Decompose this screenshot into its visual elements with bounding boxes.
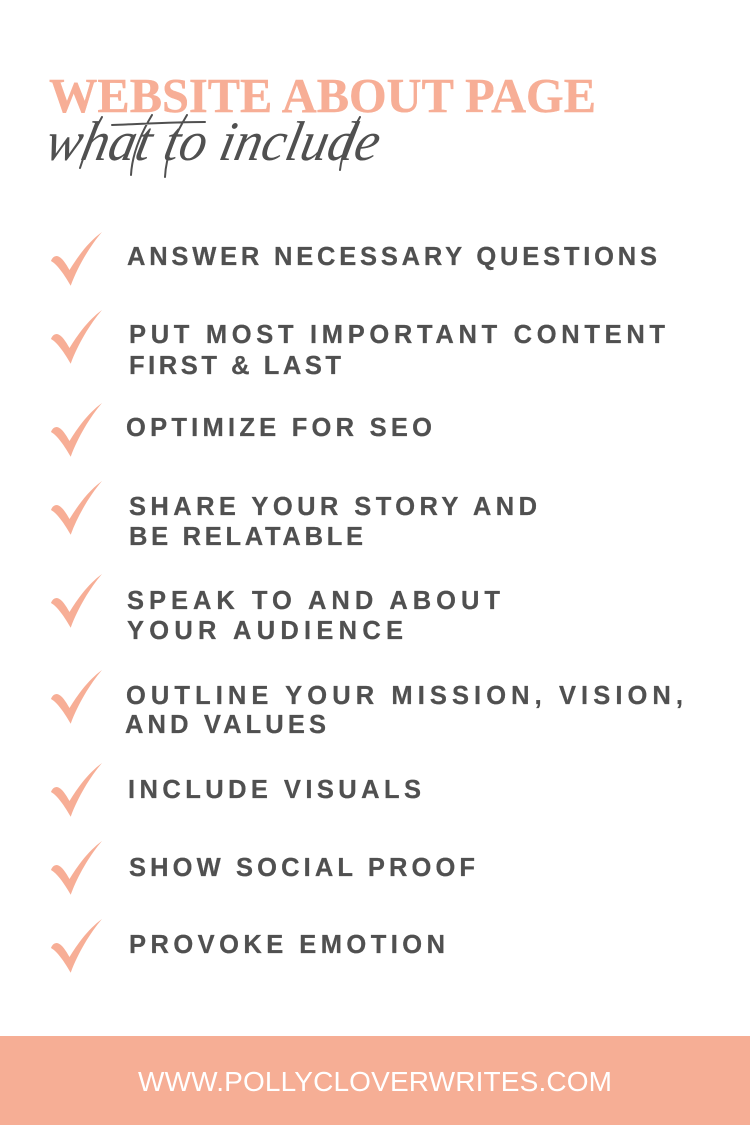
label: SPEAK TO AND ABOUT	[127, 587, 500, 615]
label	[127, 587, 500, 645]
item: show social proof	[51, 841, 475, 895]
label: OPTIMIZE FOR SEO	[126, 414, 432, 442]
icon: check mark	[51, 310, 102, 364]
footer url: WWW.POLLYCLOVERWRITES.COM	[138, 1066, 612, 1097]
footer band	[0, 1036, 750, 1125]
item: provoke emotion	[51, 919, 445, 973]
label: INCLUDE VISUALS	[128, 776, 421, 804]
item: speak to audience	[51, 574, 500, 645]
checklist	[51, 232, 683, 973]
label	[129, 493, 537, 551]
label: PUT MOST IMPORTANT CONTENT	[129, 321, 665, 349]
icon: check mark	[51, 670, 102, 724]
item: include visuals	[51, 763, 421, 817]
label: PROVOKE EMOTION	[129, 931, 445, 959]
icon: check mark	[51, 574, 102, 628]
label: ANSWER NECESSARY QUESTIONS	[127, 243, 657, 271]
label: YOUR AUDIENCE	[127, 617, 403, 645]
icon: check mark	[51, 481, 102, 535]
item: share your story	[51, 481, 537, 551]
icon: check mark	[51, 841, 102, 895]
item: mission, vision, values	[51, 670, 683, 739]
item: optimize for seo	[51, 403, 432, 457]
icon: check mark	[51, 763, 102, 817]
label	[125, 682, 683, 739]
label: SHOW SOCIAL PROOF	[129, 854, 475, 882]
subtitle: script: what to include	[40, 112, 386, 173]
item: most important content	[51, 310, 665, 380]
label: SHARE YOUR STORY AND	[129, 493, 537, 521]
icon: check mark	[51, 232, 102, 286]
icon: check mark	[51, 919, 102, 973]
label: BE RELATABLE	[129, 523, 363, 551]
icon: check mark	[51, 403, 102, 457]
label	[129, 321, 665, 380]
label: AND VALUES	[125, 711, 326, 739]
item: answer necessary questions	[51, 232, 657, 286]
label: OUTLINE YOUR MISSION, VISION,	[126, 682, 683, 710]
title: WEBSITE ABOUT PAGE	[49, 68, 596, 123]
label: FIRST & LAST	[129, 352, 341, 380]
